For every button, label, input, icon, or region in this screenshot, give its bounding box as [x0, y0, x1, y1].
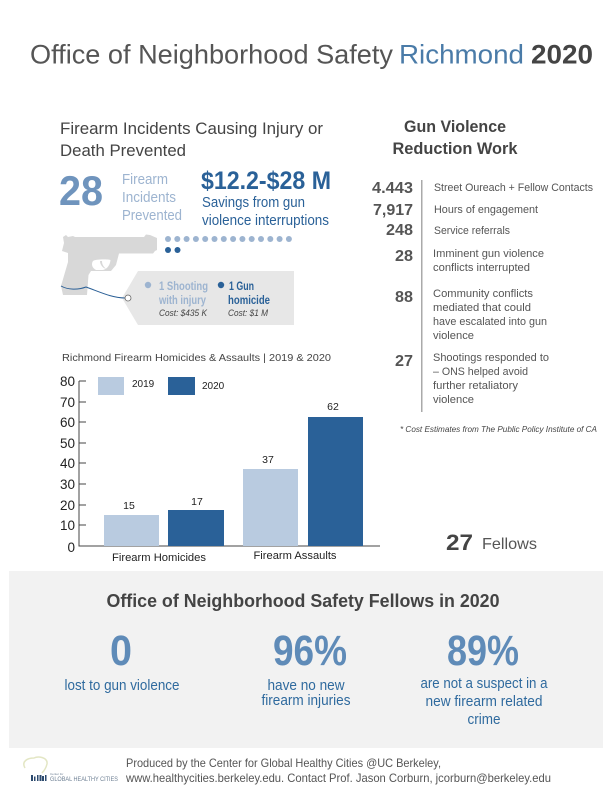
tag: incident costs: Cost: $435 K	[159, 308, 208, 319]
list: work numbers: 4.443	[372, 180, 413, 197]
stat: savings: $12.2-$28 M	[201, 167, 331, 195]
heading: incidents prevented: Firearm Incidents Causing Injury or	[60, 120, 324, 138]
dots: 14 shootings with injury	[165, 236, 292, 242]
stat: savings: violence interruptions	[202, 212, 329, 229]
list: work descriptions: Service referrals	[434, 225, 510, 237]
heading: incidents prevented: Death Prevented	[60, 142, 186, 160]
list: work descriptions: – ONS helped avoid	[433, 366, 528, 378]
stat: 28 incidents prevented	[59, 167, 182, 224]
y axis labels: 60	[60, 415, 75, 430]
list: work descriptions: conflicts interrupted	[433, 262, 530, 274]
stat: 89%: crime	[468, 712, 500, 728]
y axis labels: 70	[60, 395, 75, 410]
y axis labels: 80	[60, 374, 75, 389]
stat: 96%: 96%	[273, 627, 347, 675]
list: work descriptions: have escalated into gun	[433, 316, 547, 328]
stat: 28 incidents prevented: Firearm	[122, 172, 168, 188]
logo: center for global healthy cities	[24, 757, 119, 783]
chart title: Richmond Firearm Homicides & Assaults | 2019 & 2020	[62, 352, 331, 364]
tag: incident costs	[61, 271, 294, 325]
y axis labels: 30	[60, 477, 75, 492]
logo: center for global healthy cities: Center for	[50, 772, 63, 776]
panel: fellows in 2020	[9, 571, 603, 748]
y axis labels: 0	[67, 540, 75, 555]
divider	[421, 180, 422, 412]
category labels: Firearm Homicides	[112, 552, 207, 564]
bar values	[123, 401, 339, 512]
list: work descriptions: Hours of engagement	[434, 204, 538, 216]
stat: 27 fellows: 27	[446, 530, 473, 555]
tag: incident costs: Cost: $1 M	[228, 308, 268, 319]
list: work numbers: 28	[395, 248, 413, 265]
tag: incident costs: 1 Shooting	[159, 281, 208, 293]
legend: 2020	[202, 381, 225, 392]
stat: 89%: 89%	[447, 627, 519, 675]
stat: 28 incidents prevented: Prevented	[122, 208, 182, 224]
icon: handgun	[61, 234, 157, 295]
stat: 89%	[420, 627, 548, 728]
y axis labels	[60, 374, 75, 555]
footer credits: www.healthycities.berkeley.edu. Contact Prof. Jason Corburn, jcorburn@berkeley.edu	[125, 771, 551, 785]
stat: 0 lost	[64, 627, 180, 694]
heading: gun violence reduction work	[392, 117, 518, 158]
heading: incidents prevented	[60, 120, 324, 160]
tag: incident costs: with injury	[158, 295, 206, 307]
stat: 0 lost: 0	[110, 627, 132, 675]
stat: 28 incidents prevented: Incidents	[122, 190, 176, 206]
footer credits: Produced by the Center for Global Healthy Cities @UC Berkeley,	[126, 756, 441, 770]
list: work descriptions	[433, 182, 593, 406]
category labels	[112, 550, 337, 564]
title	[30, 40, 593, 70]
list: work numbers	[372, 180, 413, 370]
legend: 2019	[132, 379, 155, 390]
bar values: 17	[191, 496, 203, 508]
list: work descriptions: Imminent gun violence	[433, 248, 544, 260]
list: work descriptions: mediated that could	[433, 302, 531, 314]
y axis labels: 20	[60, 498, 75, 513]
stat: 96%	[262, 627, 350, 709]
logo: center for global healthy cities: GLOBAL HEALTHY CITIES	[50, 776, 119, 783]
panel heading: Office of Neighborhood Safety Fellows in 2020	[106, 591, 500, 611]
list: work descriptions: Shootings responded to	[433, 352, 549, 364]
heading: gun violence reduction work: Reduction Work	[392, 139, 518, 158]
bars	[104, 417, 363, 546]
list: work descriptions: violence	[433, 330, 474, 342]
list: work numbers: 88	[395, 289, 413, 306]
list: work numbers: 7,917	[373, 202, 413, 219]
footer credits	[125, 756, 551, 785]
stat: 89%: new firearm related	[426, 694, 542, 710]
dots: 2 gun homicides	[165, 247, 180, 253]
stat: 89%: are not a suspect in a	[420, 676, 548, 692]
list: work descriptions: violence	[433, 394, 474, 406]
stat: 96%: firearm injuries	[262, 693, 350, 709]
stat: 27 fellows	[446, 530, 537, 555]
stat: savings: Savings from gun	[202, 194, 305, 211]
list: work descriptions: Street Oureach + Fellow Contacts	[434, 182, 593, 194]
list: work descriptions: Community conflicts	[433, 288, 534, 300]
y axis labels: 40	[60, 456, 75, 471]
title: Richmond	[399, 40, 524, 70]
stat: 0 lost: lost to gun violence	[64, 678, 180, 694]
legend	[98, 377, 225, 395]
stat: 27 fellows: Fellows	[482, 536, 537, 553]
y axis labels: 50	[60, 436, 75, 451]
bar chart	[60, 374, 380, 564]
stat: 28 incidents prevented: 28	[59, 167, 103, 214]
title: 2020	[531, 40, 593, 70]
stat: 96%: have no new	[268, 678, 345, 694]
heading: gun violence reduction work: Gun Violence	[404, 117, 506, 136]
list: work numbers: 248	[386, 222, 413, 239]
bar values: 62	[327, 401, 339, 413]
footnote: * Cost Estimates from The Public Policy Institute of CA	[400, 424, 597, 434]
category labels: Firearm Assaults	[254, 550, 337, 562]
tag: incident costs: homicide	[228, 295, 270, 307]
y axis labels: 10	[60, 518, 75, 533]
bar values: 15	[123, 500, 135, 512]
title: Office of Neighborhood Safety	[30, 40, 393, 70]
list: work descriptions: further retaliatory	[433, 380, 518, 392]
tag: incident costs: 1 Gun	[229, 281, 254, 293]
bar values: 37	[262, 454, 274, 466]
list: work numbers: 27	[395, 353, 413, 370]
stat: savings	[201, 167, 331, 229]
